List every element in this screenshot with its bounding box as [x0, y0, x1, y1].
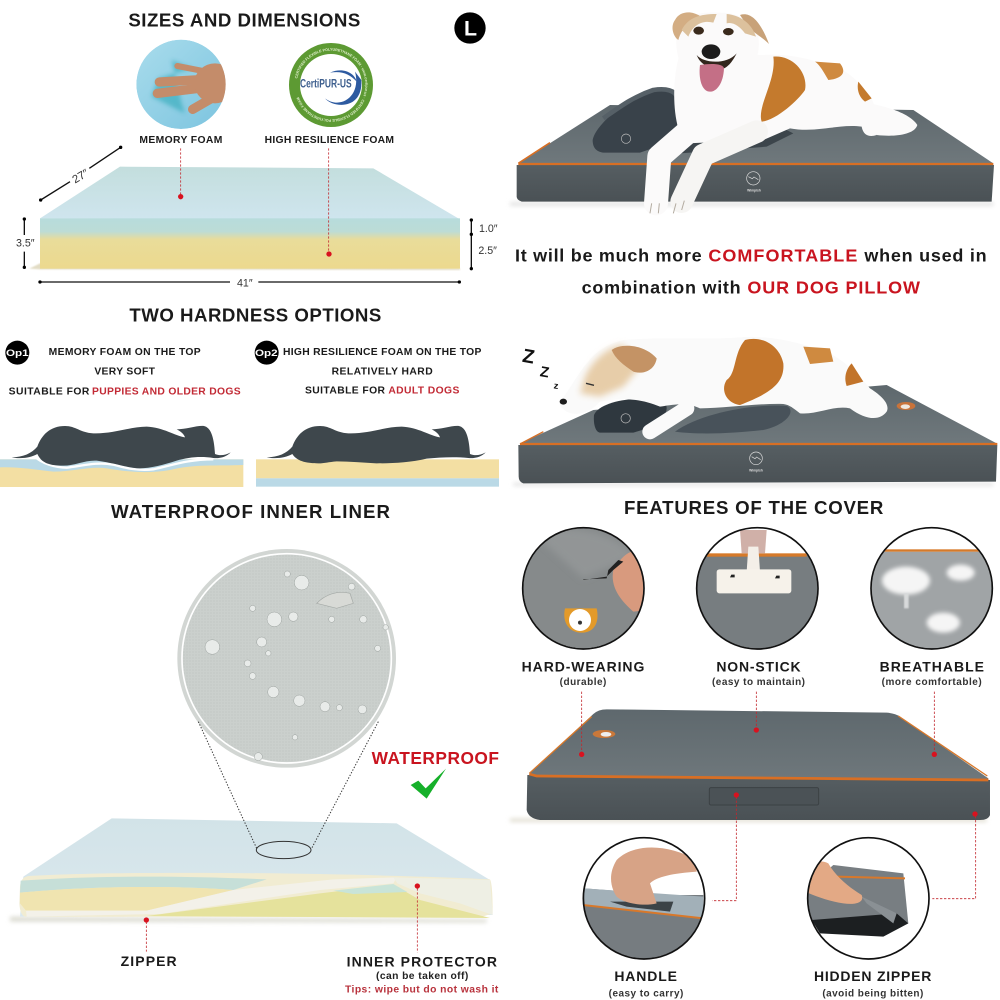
callout: zipper: ZIPPER: [121, 953, 177, 969]
feature: hard-wearing: (durable): [560, 677, 606, 688]
zoom lens lines and ellipse: [198, 722, 378, 859]
dimension: layers 1.0 and 2.5 inches: [470, 218, 498, 270]
icon: green check mark: [411, 769, 446, 799]
diagram: firm foam with dog on top: [256, 426, 499, 487]
diagram: soft foam with sinking dog: [0, 426, 243, 487]
panel: two hardness options: [0, 305, 499, 487]
icon: size L badge: [454, 12, 486, 44]
option 2 text: HIGH RESILIENCE FOAM ON THE TOP: [283, 347, 481, 358]
message: more comfortable with dog pillow: COMFORTABLE: [708, 246, 857, 266]
dimension: width 27 inches: 27″: [71, 167, 91, 186]
callout: inner protector: INNER PROTECTOR: [347, 953, 497, 969]
feature: handle: (easy to carry): [609, 988, 683, 999]
option 1 text: [5, 341, 241, 397]
feature: hidden zipper: (avoid being bitten): [822, 988, 923, 999]
dimension: height 3.5 inches: 3.5″: [16, 237, 35, 249]
feature: non-stick: (easy to maintain): [712, 677, 805, 688]
photo: dog awake on bed: [510, 12, 994, 213]
label: waterproof: WATERPROOF: [372, 748, 499, 768]
option 1 text: MEMORY FOAM ON THE TOP: [49, 347, 201, 358]
feature: hidden zipper: HIDDEN ZIPPER: [814, 968, 931, 984]
icon: CertiPUR-US seal: CertiPUR-US: [300, 76, 352, 90]
feature: non-stick: NON-STICK: [716, 658, 801, 674]
callout: inner protector: Tips: wipe but do not wash it: [345, 985, 499, 996]
callout: zipper: [121, 917, 177, 969]
photo: dog asleep on pillow: [513, 337, 997, 486]
heading: waterproof inner liner: WATERPROOF INNER LINER: [111, 501, 391, 522]
callout line: memory foam: [178, 148, 183, 199]
callout: inner protector: (can be taken off): [376, 971, 468, 982]
message: more comfortable with dog pillow: It will be much more: [515, 246, 702, 266]
dimension: length 41 inches: [38, 278, 461, 290]
label: memory foam: MEMORY FOAM: [139, 135, 222, 146]
icon: sleeping Z letters: Z: [521, 346, 536, 369]
option 1 text: Op1: [6, 348, 29, 358]
feature: handle: HANDLE: [614, 968, 677, 984]
heading: features of the cover: FEATURES OF THE COVER: [624, 497, 884, 518]
option 2 text: RELATIVELY HARD: [332, 366, 433, 377]
dimension: length 41 inches: 41″: [237, 278, 253, 290]
feature: non-stick: [697, 528, 818, 688]
callout line: high resilience foam: [326, 148, 332, 257]
option 1 text: PUPPIES AND OLDER DOGS: [92, 386, 241, 397]
icon: CertiPUR-US seal: CERTIFIED FLEXIBLE POLYURETHANE FOAM · www.certipur.us · CERTIFIED FLEXIBLE POLYURETHANE FOAM: [295, 48, 368, 122]
panel: features of the cover: [510, 497, 993, 999]
photo: dog asleep on pillow: Wimpish: [749, 469, 763, 473]
foam block diagram: [29, 167, 460, 270]
option 2 text: ADULT DOGS: [388, 386, 459, 397]
heading: sizes and dimensions: SIZES AND DIMENSIONS: [128, 10, 360, 31]
icon: sleeping Z letters: z: [553, 380, 559, 391]
icon: memory foam hand print: [136, 40, 236, 129]
panel: dog with pillow and combination message: [510, 12, 997, 486]
dimension: layers 1.0 and 2.5 inches: 1.0″: [479, 223, 498, 235]
dimension: height 3.5 inches: [16, 217, 35, 269]
feature: breathable: BREATHABLE: [880, 658, 984, 674]
option 2 text: Op2: [255, 348, 278, 358]
photo: dog awake on bed: Wimpish: [747, 189, 761, 193]
option 1 text: SUITABLE FOR: [9, 386, 90, 397]
option 2 text: [255, 341, 481, 397]
dimension: width 27 inches: [39, 146, 122, 202]
icon: sleeping Z letters: Z: [539, 364, 550, 381]
dimension: layers 1.0 and 2.5 inches: 2.5″: [478, 245, 497, 257]
message: more comfortable with dog pillow: combination with: [582, 277, 741, 297]
grey mattress with cover details: [510, 709, 990, 822]
feature: hidden zipper: [805, 838, 931, 999]
callout lines to mattress features: [579, 692, 978, 901]
panel: waterproof inner liner: [10, 501, 499, 996]
magnified liner fabric with droplets: [177, 549, 396, 768]
callout: inner protector: [345, 883, 499, 996]
heading: two hardness options: TWO HARDNESS OPTIONS: [129, 305, 381, 326]
message: more comfortable with dog pillow: [515, 246, 987, 297]
icon: sleeping Z letters: [521, 346, 559, 391]
icon: size L badge: L: [464, 17, 477, 41]
message: more comfortable with dog pillow: OUR DOG PILLOW: [747, 277, 920, 297]
option 2 text: SUITABLE FOR: [305, 386, 386, 397]
feature: breathable: [870, 528, 993, 688]
feature: hard-wearing: [522, 528, 647, 688]
feature: hard-wearing: HARD-WEARING: [522, 658, 644, 674]
option 1 text: VERY SOFT: [94, 367, 156, 378]
label: high resilience foam: HIGH RESILIENCE FOAM: [265, 135, 394, 146]
waterproof mattress liner: [10, 818, 493, 923]
feature: handle: [583, 838, 705, 999]
feature: breathable: (more comfortable): [882, 677, 982, 688]
panel: sizes and dimensions: [16, 10, 498, 290]
message: more comfortable with dog pillow: when used in: [863, 246, 987, 266]
